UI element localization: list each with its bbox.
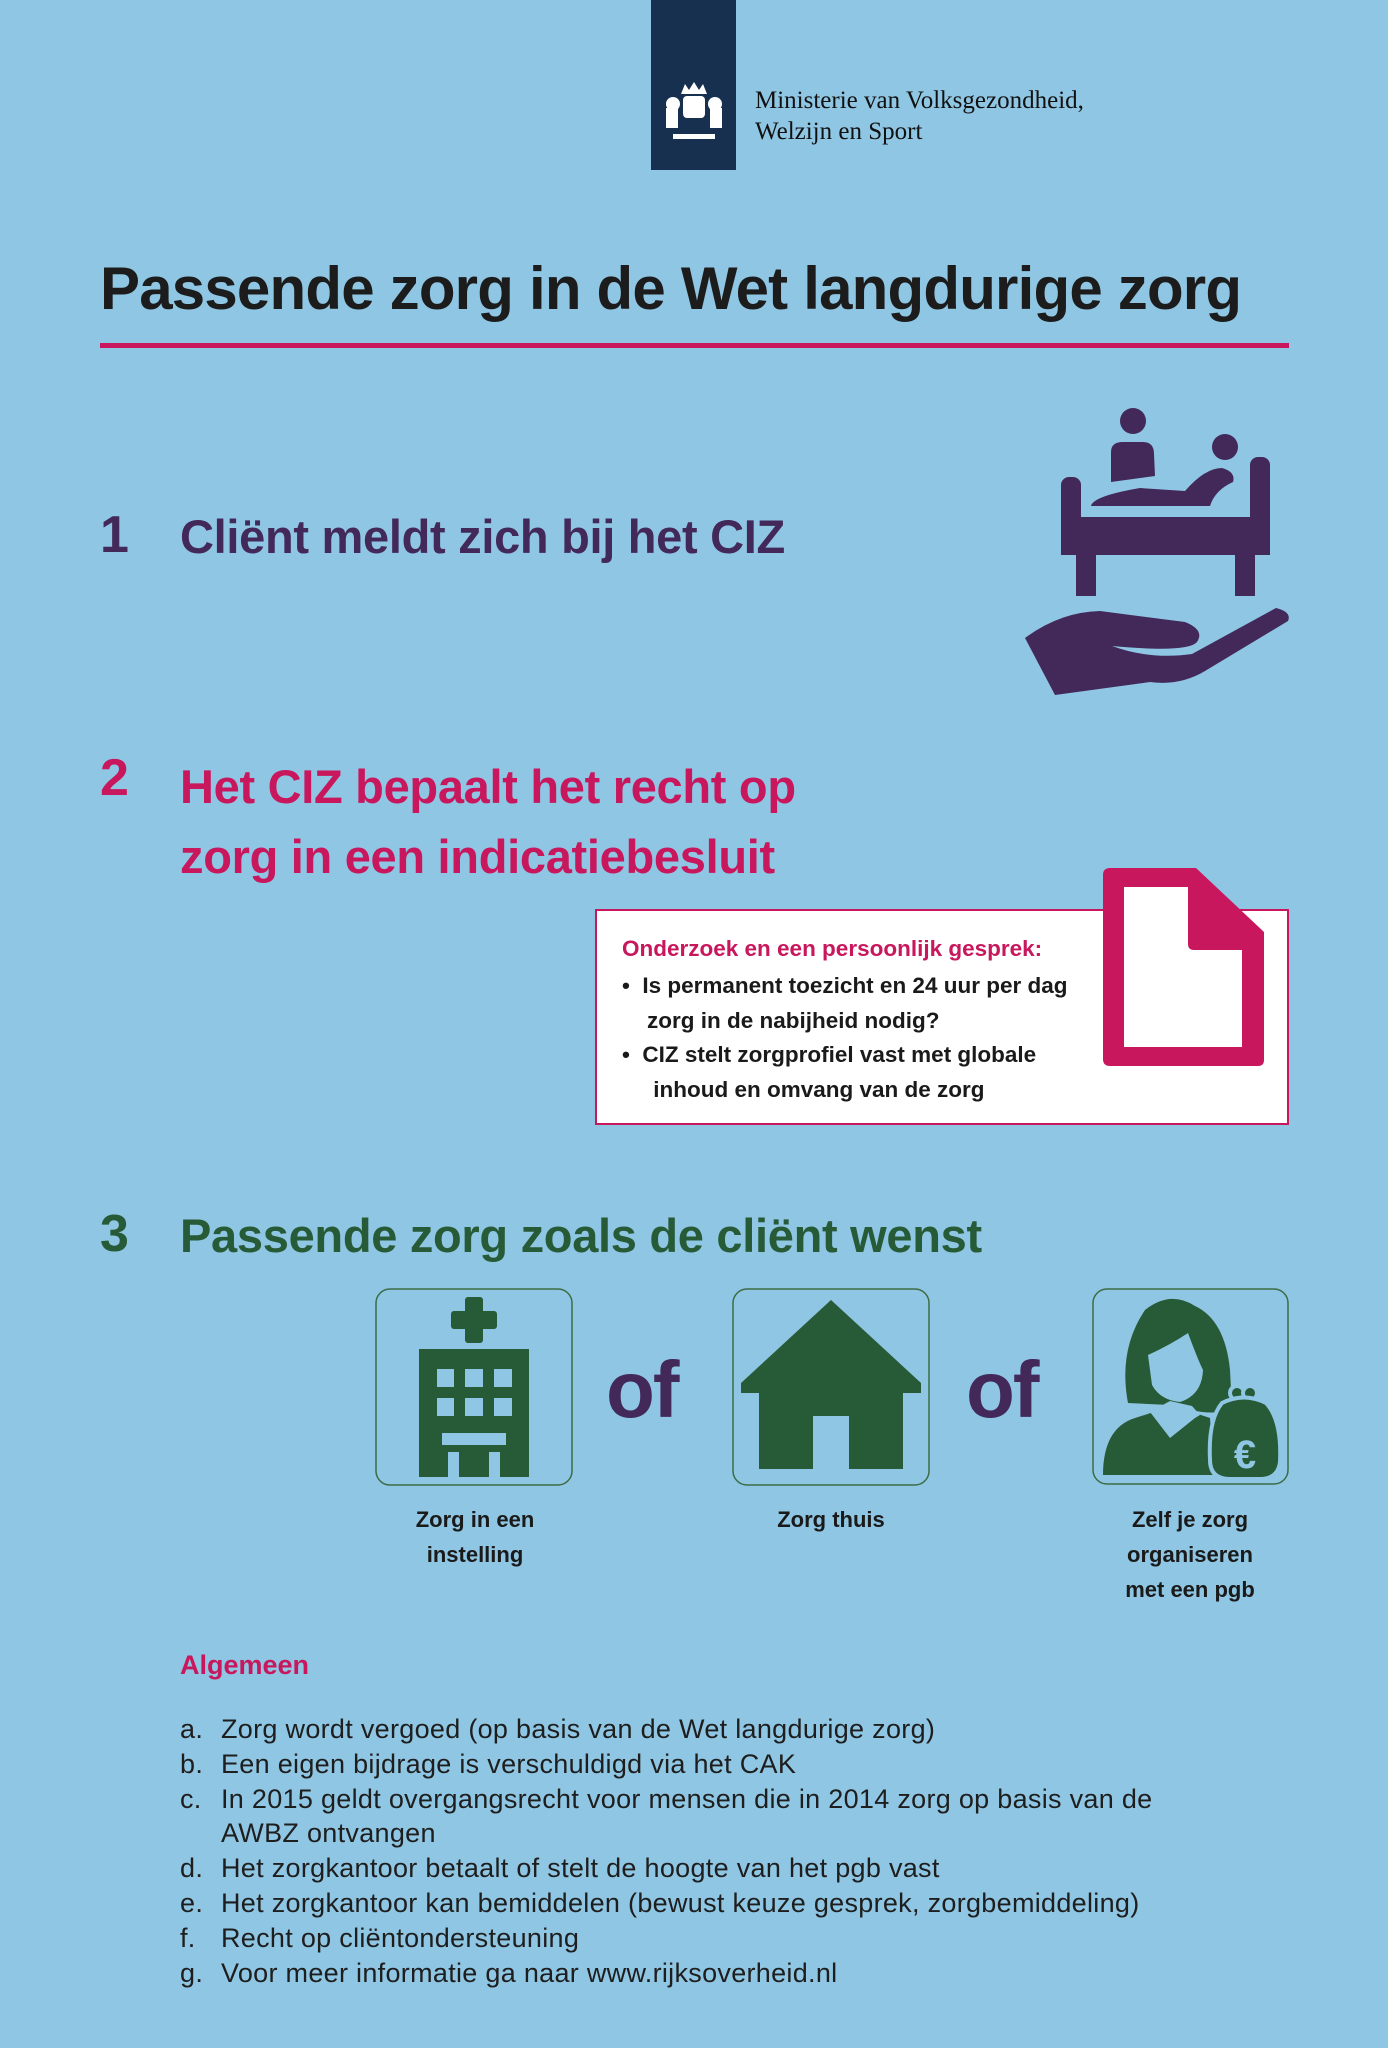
algemeen list: Het zorgkantoor betaalt of stelt de hoogte van het pgb vast <box>221 1853 940 1883</box>
icon: house <box>732 1288 930 1486</box>
of 2: of <box>966 1345 1038 1434</box>
panel bullets: • CIZ stelt zorgprofiel vast met globale <box>622 1042 1036 1067</box>
icon: woman with purse: € <box>1234 1433 1256 1477</box>
step 1 number: 1 <box>100 506 129 564</box>
step 2 heading: Het CIZ bepaalt het recht op <box>180 760 796 813</box>
step 3 <box>100 1205 982 1263</box>
algemeen list: Een eigen bijdrage is verschuldigd via het CAK <box>221 1749 796 1779</box>
icon: bed in hand <box>1025 408 1289 695</box>
panel bullets: • Is permanent toezicht en 24 uur per dag <box>622 973 1067 998</box>
logo text: Welzijn en Sport <box>755 118 922 145</box>
step 3 heading: Passende zorg zoals de cliënt wenst <box>180 1209 982 1262</box>
label: Zorg thuis <box>777 1507 885 1532</box>
logo bar <box>651 0 736 170</box>
step 2 heading <box>180 760 796 883</box>
algemeen list: In 2015 geldt overgangsrecht voor mensen die in 2014 zorg op basis van de <box>221 1784 1153 1814</box>
option: thuis <box>732 1288 930 1532</box>
icon: document <box>1103 868 1264 1066</box>
algemeen list: f. <box>180 1923 196 1953</box>
section: algemeen <box>180 1650 1153 1988</box>
algemeen list: a. <box>180 1714 203 1744</box>
label: met een pgb <box>1125 1577 1255 1602</box>
option: pgb <box>1092 1288 1289 1602</box>
panel bullets <box>622 973 1067 1102</box>
step 1 <box>100 506 785 564</box>
of 1: of <box>606 1345 678 1434</box>
label: Zelf je zorg <box>1132 1507 1248 1532</box>
panel: onderzoek <box>595 909 1289 1125</box>
algemeen list: Zorg wordt vergoed (op basis van de Wet langdurige zorg) <box>221 1714 935 1744</box>
algemeen list: c. <box>180 1784 202 1814</box>
step 2 number: 2 <box>100 749 129 807</box>
option: instelling <box>375 1288 573 1567</box>
algemeen list <box>180 1714 1153 1988</box>
icon: hospital <box>375 1288 573 1486</box>
step 2 <box>100 749 796 883</box>
panel bullets: zorg in de nabijheid nodig? <box>647 1008 939 1032</box>
label: Zorg in een <box>416 1507 534 1532</box>
algemeen list: d. <box>180 1853 203 1883</box>
step 3 number: 3 <box>100 1205 129 1263</box>
label: organiseren <box>1127 1542 1253 1567</box>
label: instelling <box>427 1542 523 1567</box>
logo text <box>755 87 1084 145</box>
algemeen list: e. <box>180 1888 203 1918</box>
label <box>416 1507 534 1567</box>
algemeen list: Recht op cliëntondersteuning <box>221 1923 579 1953</box>
panel heading: Onderzoek en een persoonlijk gesprek: <box>622 936 1042 961</box>
algemeen list: b. <box>180 1749 203 1779</box>
step 1 heading: Cliënt meldt zich bij het CIZ <box>180 510 785 563</box>
panel bullets: inhoud en omvang van de zorg <box>653 1076 985 1102</box>
step 2 heading: zorg in een indicatiebesluit <box>180 830 775 883</box>
title: Passende zorg in de Wet langdurige zorg <box>100 255 1241 322</box>
algemeen list: Het zorgkantoor kan bemiddelen (bewust keuze gesprek, zorgbemiddeling) <box>221 1888 1140 1918</box>
algemeen list: Voor meer informatie ga naar www.rijksoverheid.nl <box>221 1958 837 1988</box>
icon: woman with purse <box>1092 1288 1289 1485</box>
label <box>1125 1507 1255 1602</box>
logo: ministry <box>651 0 1084 170</box>
algemeen list: g. <box>180 1958 203 1988</box>
logo text: Ministerie van Volksgezondheid, <box>755 87 1084 114</box>
algemeen heading: Algemeen <box>180 1650 309 1680</box>
algemeen list: AWBZ ontvangen <box>221 1818 436 1848</box>
title underline <box>100 343 1289 348</box>
